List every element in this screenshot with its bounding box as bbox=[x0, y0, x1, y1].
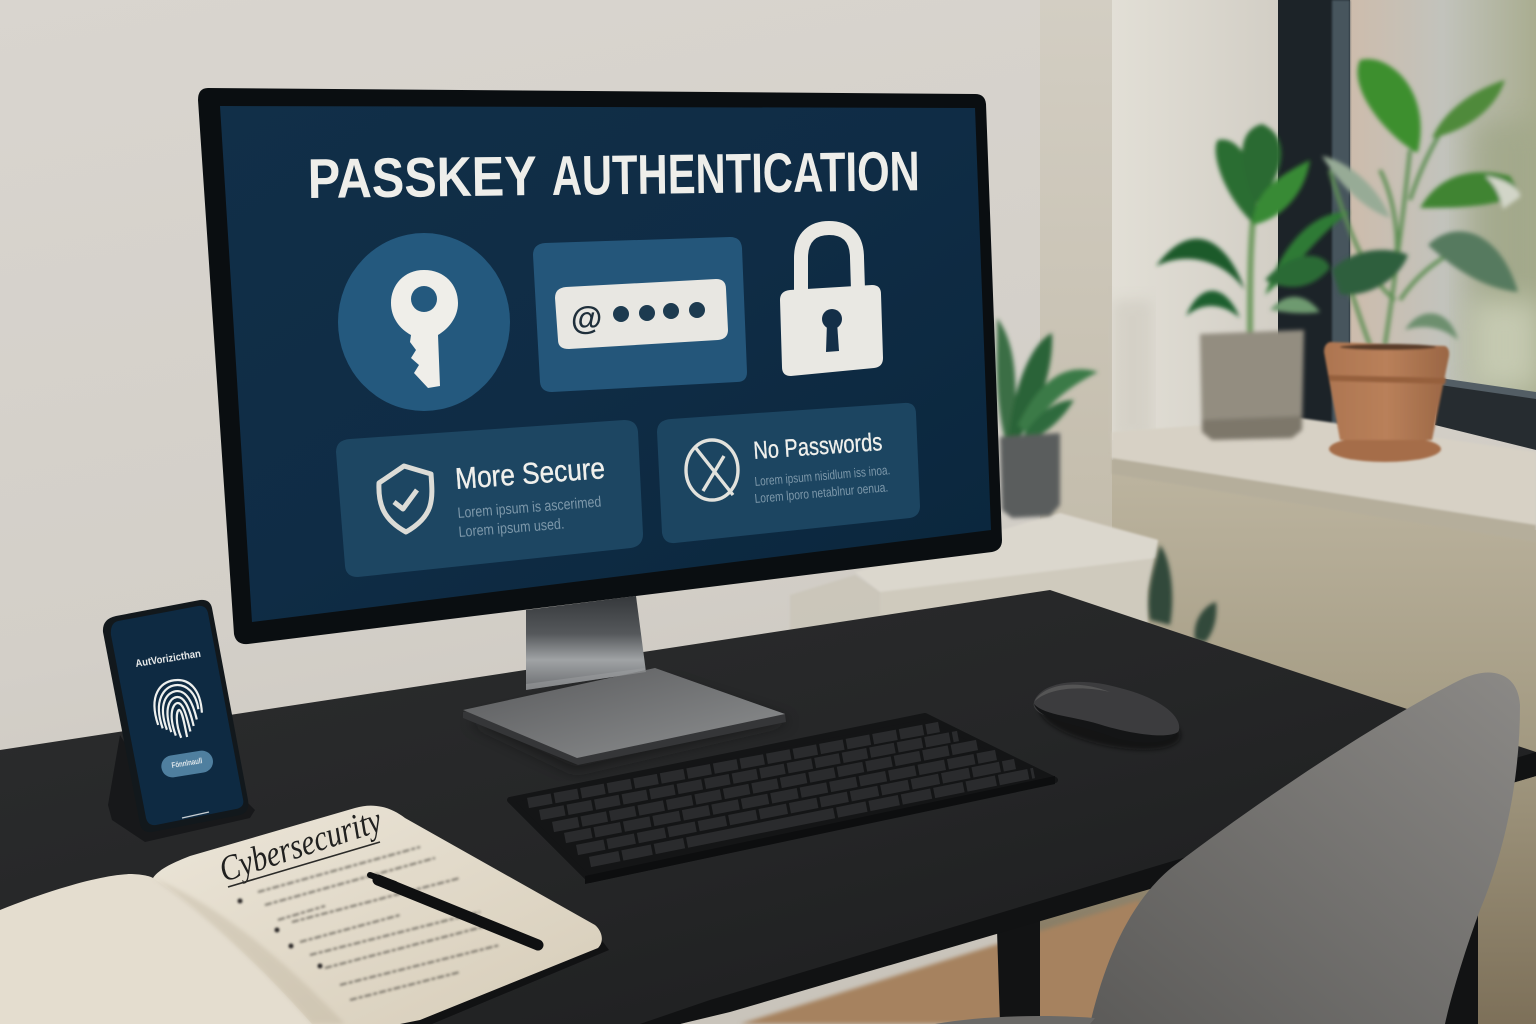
icon: password field: @ bbox=[571, 300, 602, 336]
phone button bbox=[160, 749, 215, 779]
notebook bbox=[0, 800, 609, 1024]
mouse bbox=[1034, 682, 1185, 760]
pen bbox=[370, 875, 538, 945]
plant: small behind monitor bbox=[997, 318, 1216, 642]
card: more secure bbox=[336, 420, 643, 577]
body text: more secure: Lorem ipsum used. bbox=[458, 516, 565, 541]
page fold shadow bbox=[153, 878, 345, 1024]
heading: no passwords: No Passwords bbox=[752, 428, 883, 465]
icon: shield bbox=[379, 466, 432, 532]
terracotta pot body bbox=[1324, 342, 1449, 462]
phone body bbox=[103, 600, 248, 832]
heading: more secure: More Secure bbox=[454, 452, 606, 496]
phone label: AutVorizicthan bbox=[135, 648, 202, 670]
monitor bbox=[198, 88, 1002, 644]
left page bbox=[0, 874, 400, 1024]
window sill bbox=[1112, 418, 1536, 542]
title: PASSKEY bbox=[307, 144, 537, 210]
phone screen bbox=[111, 606, 243, 825]
plant: terracotta pot bbox=[1322, 59, 1520, 345]
phone bbox=[103, 600, 255, 842]
notebook cover bbox=[380, 938, 609, 1024]
keyboard bbox=[510, 716, 1055, 884]
desk legs bbox=[997, 830, 1478, 1024]
phone stand bbox=[108, 735, 255, 842]
title: AUTHENTICATION bbox=[551, 139, 920, 207]
title bbox=[307, 139, 920, 210]
monitor stand bbox=[463, 596, 790, 772]
phone home bar bbox=[182, 812, 209, 818]
handwriting: Cybersecurity: Cybersecurity bbox=[214, 800, 386, 890]
handwritten notes bbox=[258, 847, 500, 1000]
body text: no passwords: Lorem lporo netablnur oenua. bbox=[754, 479, 889, 506]
icon: key bbox=[338, 233, 510, 411]
desk bbox=[0, 590, 1536, 1024]
icon: padlock bbox=[780, 228, 883, 376]
chair bbox=[935, 672, 1520, 1024]
window bbox=[1278, 0, 1536, 450]
icon: password field bbox=[533, 237, 747, 392]
plant: grey pot bbox=[1156, 124, 1350, 440]
body text: more secure bbox=[457, 493, 602, 541]
monitor bezel bbox=[198, 88, 1002, 644]
body text: more secure: Lorem ipsum is ascerimed bbox=[457, 493, 602, 522]
bullets bbox=[238, 898, 322, 968]
icon: fingerprint bbox=[151, 677, 205, 741]
cabinet bbox=[790, 513, 1158, 640]
icon: crossed circle bbox=[686, 440, 738, 500]
card: no passwords bbox=[657, 403, 920, 543]
phone button: Fönnlnaull bbox=[171, 756, 203, 770]
right page bbox=[153, 806, 602, 1024]
floor bbox=[740, 900, 1140, 1024]
body text: no passwords bbox=[754, 462, 891, 506]
monitor screen bbox=[220, 106, 991, 622]
body text: no passwords: Lorem ipsum nisidlum iss inoa. bbox=[754, 462, 891, 489]
